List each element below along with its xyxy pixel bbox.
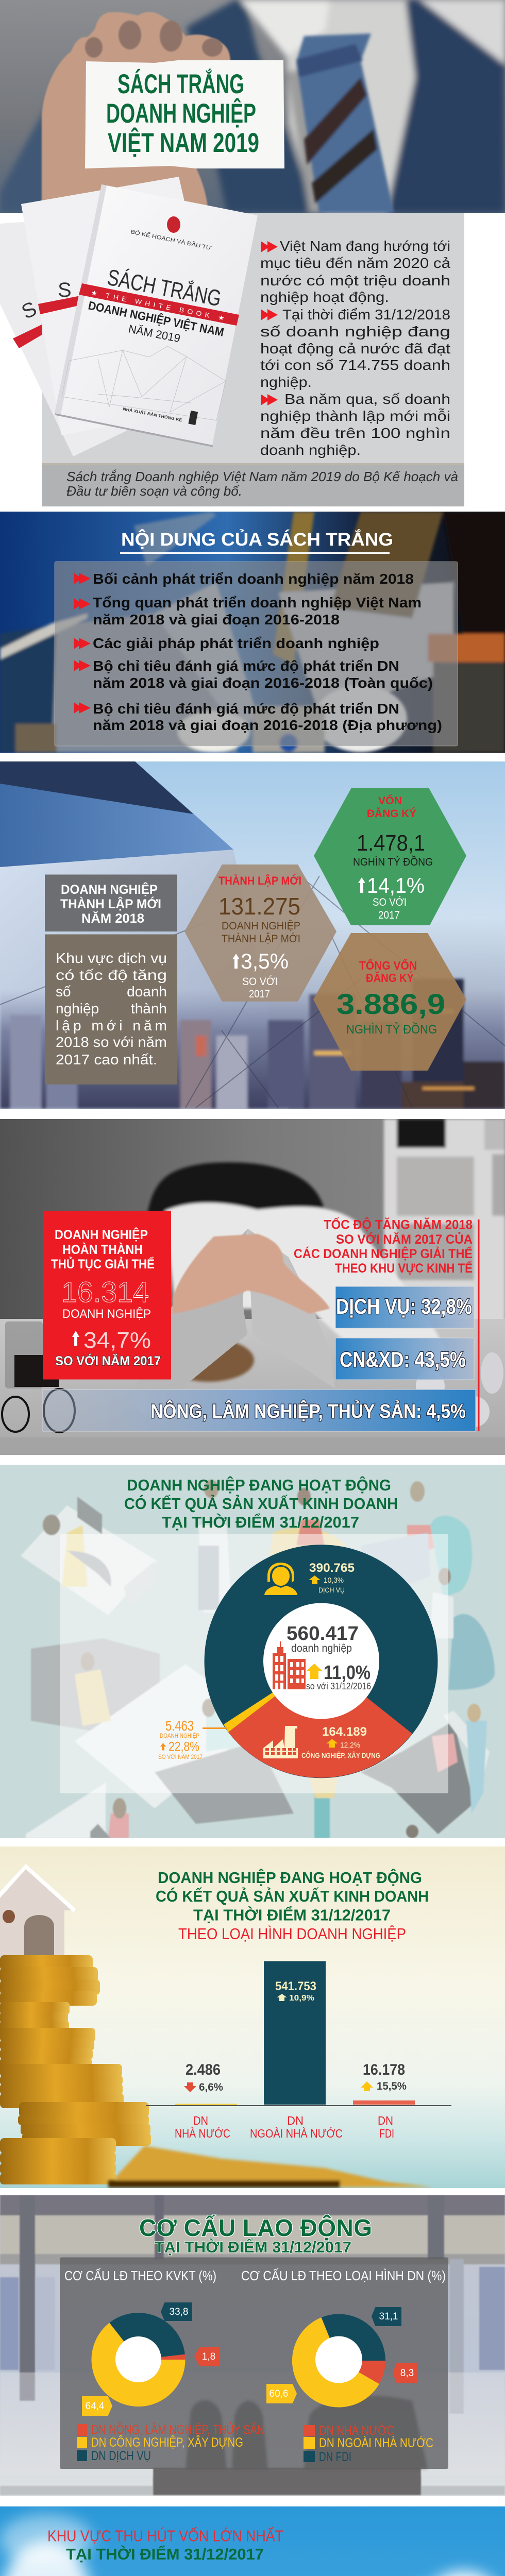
stat: agriculture [43, 1389, 476, 1431]
panel: dissolved enterprises figures: 16.314 [61, 1276, 149, 1308]
list item: Bộ chỉ tiêu đánh giá mức độ phát triển DN [93, 658, 399, 674]
hexagon: registered capital: NGHÌN TỶ ĐỒNG [353, 856, 433, 868]
bar: non-state enterprises: 10,9% [289, 1994, 314, 2003]
text block: services sector note: doanh [127, 984, 167, 999]
callout: agriculture share: 1,8 [202, 2351, 215, 2362]
photo: office interior [0, 2195, 505, 2495]
list item [93, 658, 433, 691]
panel: dissolved enterprises figures: DOANH NGHIỆP [62, 1307, 151, 1321]
callout: non-state share [267, 2384, 296, 2403]
icon: factory [263, 1726, 298, 1758]
illustration: stack of white books: S [18, 297, 40, 324]
text block: book bullet points: Việt Nam đang hướng tới [280, 238, 450, 254]
bar chart: enterprises by ownership [146, 1961, 451, 2140]
hexagon: newly established: THÀNH LẬP MỚI [218, 874, 301, 887]
hexagon: registered capital: 2017 [378, 909, 400, 921]
panel: dissolved enterprises [0, 1119, 505, 1455]
callout: services share: 33,8 [170, 2307, 188, 2317]
heading: TẠI THỜI ĐIỂM 31/12/2017 [155, 2238, 351, 2256]
hexagon: registered capital: ĐĂNG KÝ [367, 807, 416, 820]
icon: red double arrow [74, 598, 91, 609]
icon: red double arrow [261, 309, 278, 320]
illustration: stack of white books: ★ THE WHITE BOOK ★ [90, 289, 228, 323]
panel: dissolved enterprises figures: 34,7% [83, 1328, 151, 1353]
heading [139, 2214, 372, 2256]
text block: services sector note: nghiệp [56, 1001, 99, 1016]
panel: active enterprises by ownership [0, 1846, 505, 2188]
bar: non-state enterprises [264, 1961, 326, 2105]
stat: industry and construction: CÔNG NGHIỆP, XÂY DỰNG [301, 1751, 380, 1759]
stat: industry and construction [335, 1338, 474, 1380]
callout: services share [161, 2303, 192, 2320]
hexagon: total registered capital: TỔNG VỐN [359, 958, 417, 972]
panel: dissolved enterprises figures [43, 1211, 171, 1380]
panel: active enterprises circle chart [0, 1465, 505, 1838]
callout: industry share [82, 2397, 112, 2415]
stat: total active enterprises: 560.417 [287, 1623, 359, 1645]
hexagon: newly established [184, 865, 336, 1002]
donut chart: active enterprises by sector [158, 1545, 438, 1778]
stat: total active enterprises [287, 1623, 371, 1691]
text block: services sector note: Khu vực dịch vụ [56, 950, 167, 966]
panel: dissolved enterprises figures: DOANH NGHIỆP [55, 1227, 148, 1242]
heading: DOANH NGHIỆP ĐANG HOẠT ĐỘNG [158, 1868, 422, 1887]
icon: ministry emblem [167, 216, 180, 233]
heading: CÓ KẾT QUẢ SẢN XUẤT KINH DOANH [156, 1887, 429, 1905]
hexagon: total registered capital [313, 933, 466, 1071]
heading: NỘI DUNG CỦA SÁCH TRẮNG [121, 529, 393, 550]
stat: services [309, 1561, 355, 1594]
hexagon: total registered capital: ĐĂNG KÝ [366, 971, 414, 985]
icon: hand holding card [42, 12, 230, 213]
text block: services sector note: số [56, 984, 71, 999]
photo: gold coins and house [0, 1864, 433, 2188]
text block: book bullet points: mục tiêu đến năm 2020 cả [260, 255, 450, 271]
heading: TẠI THỜI ĐIỂM 31/12/2017 [193, 1905, 391, 1924]
photo: office shelf [384, 1119, 505, 1335]
illustration: stack of white books: BỘ KẾ HOẠCH VÀ ĐẦU TƯ [130, 228, 212, 251]
text block: book bullet points: nghiệp. [260, 374, 312, 390]
hexagon: newly established: 2017 [249, 988, 270, 1000]
title: VIỆT NAM 2019 [108, 127, 259, 158]
stat: agriculture: SO VỚI NĂM 2017 [158, 1753, 203, 1760]
callout: FDI share: 31,1 [379, 2311, 398, 2322]
photo: glass and spectacles [2, 1321, 503, 1432]
legend: ownership: DN FDI [319, 2450, 351, 2464]
heading: TẠI THỜI ĐIỂM 31/12/2017 [162, 1513, 359, 1531]
donut chart: labour by economic sector [82, 2303, 218, 2415]
list item [93, 701, 442, 733]
stat: total active enterprises: 11,0% [324, 1662, 371, 1684]
title [106, 68, 259, 158]
city skyline [0, 979, 505, 1109]
stat: FDI enterprises: 16.178 [363, 2061, 405, 2078]
stat: agriculture [158, 1718, 227, 1760]
stat: industry and construction: 164.189 [322, 1725, 367, 1739]
chart title: CƠ CẤU LĐ THEO LOẠI HÌNH DN (%) [241, 2268, 446, 2283]
bar: non-state enterprises: 541.753 [275, 1979, 316, 1993]
hexagon: registered capital: 1.478,1 [357, 831, 425, 856]
panel: new enterprises heading: THÀNH LẬP MỚI [60, 896, 161, 911]
illustration: people silhouettes [186, 2396, 428, 2469]
icon: red office buildings [273, 1641, 306, 1689]
heading: THEO LOẠI HÌNH DOANH NGHIỆP [178, 1925, 406, 1943]
axis labels: DN [287, 2114, 304, 2127]
hexagon: registered capital: SO VỚI [373, 896, 407, 908]
panel: dissolved enterprises figures: THỦ TỤC GIẢI THỂ [51, 1256, 155, 1272]
hexagon: registered capital [314, 788, 466, 925]
hexagon: newly established: 131.275 [218, 893, 300, 920]
hexagon: total registered capital: NGHÌN TỶ ĐỒNG [346, 1022, 437, 1037]
panel: book contents [0, 512, 505, 753]
panel: new enterprises heading: NĂM 2018 [81, 911, 144, 926]
text block: book bullet points: Ba năm qua, số doanh [284, 391, 450, 407]
illustration: stack of white books: SÁCH TRẮNG [105, 264, 224, 312]
text block: services sector note: lập mới năm [56, 1018, 167, 1033]
stat: industry and construction: CN&XD: 43,5% [340, 1347, 466, 1371]
illustration: isometric office background [21, 1480, 495, 1838]
illustration: stack of white books [0, 177, 258, 456]
legend: economic sectors [77, 2421, 264, 2463]
panel: new enterprises heading: DOANH NGHIỆP [61, 882, 158, 897]
text block: book bullet points: nghiệp thành lập mới mỗi [260, 408, 450, 424]
axis labels [175, 2114, 394, 2140]
list item: Các giải pháp phát triển doanh nghiệp [93, 635, 379, 651]
text block: book bullet points: doanh nghiệp. [260, 442, 361, 458]
photo: person at laptop [144, 1162, 453, 1382]
hexagon: newly established: 3,5% [241, 949, 289, 973]
legend: ownership: DN NGOÀI NHÀ NƯỚC [319, 2435, 433, 2450]
donut chart: labour by ownership [267, 2308, 417, 2408]
text block: book bullet points: nước có một triệu doanh [260, 273, 450, 289]
callout: industry share: 64,4 [86, 2401, 105, 2412]
stat: services: 10,3% [324, 1576, 344, 1585]
chart title: CƠ CẤU LĐ THEO KVKT (%) [64, 2268, 216, 2283]
list item: Tổng quan phát triển doanh nghiệp Việt Nam [93, 595, 422, 611]
axis labels: DN [193, 2114, 208, 2127]
heading [124, 1476, 398, 1531]
dark chart panel [60, 2258, 448, 2469]
axis labels: FDI [379, 2127, 394, 2140]
panel: dissolved enterprises figures: SO VỚI NĂM 2017 [55, 1353, 161, 1368]
heading: CƠ CẤU LAO ĐỘNG [139, 2214, 372, 2241]
icon: fingernails [85, 21, 223, 58]
legend: ownership: DN NHÀ NƯỚC [319, 2423, 394, 2438]
text block: book bullet points: hoạt động cả nước đã đạt [260, 341, 450, 357]
list item: năm 2018 và giai đoạn 2016-2018 [93, 612, 340, 628]
hexagon: newly established: DOANH NGHIỆP [222, 920, 300, 932]
illustration: stack of white books: NHÀ XUẤT BẢN THỐNG KÊ [123, 406, 183, 422]
callout: state share [393, 2364, 417, 2382]
heading: growth by sector: THEO KHU VỰC KINH TẾ [335, 1261, 473, 1276]
heading: KHU VỰC THU HÚT VỐN LỚN NHẤT [47, 2527, 283, 2545]
caption bar: Sách trắng Doanh nghiệp Việt Nam năm 2019 do Bộ Kế hoạch và [66, 469, 458, 484]
stat: FDI enterprises [361, 2061, 407, 2092]
stat: services: DỊCH VỤ: 32,8% [336, 1294, 472, 1318]
caption bar: Đầu tư biên soạn và công bố. [66, 483, 242, 499]
panel: dissolved enterprises figures: HOÀN THÀNH [62, 1242, 143, 1257]
heading: growth by sector: CÁC DOANH NGHIỆP GIẢI THỂ [294, 1246, 473, 1261]
text block: services sector note: 2017 cao nhất. [56, 1052, 157, 1067]
title: DOANH NGHIỆP [106, 97, 256, 129]
stat: services: 390.765 [309, 1561, 355, 1575]
axis labels: NGOÀI NHÀ NƯỚC [250, 2127, 343, 2140]
panel: book summary on grey [0, 177, 464, 506]
panel: new enterprises heading [45, 875, 177, 931]
stat: industry and construction: 12,2% [340, 1741, 360, 1750]
legend: economic sectors: DN DỊCH VỤ [91, 2449, 151, 2463]
hexagon: registered capital: VỐN [378, 794, 402, 807]
stat: industry and construction [301, 1725, 380, 1759]
panel: hero photo with title card [0, 0, 505, 213]
icon: headset agent [264, 1563, 297, 1595]
callout: agriculture share [195, 2347, 218, 2366]
list item [93, 595, 422, 628]
icon: red double arrow [74, 660, 91, 671]
title: SÁCH TRẮNG [117, 68, 244, 99]
stat: total active enterprises: doanh nghiệp [291, 1642, 352, 1654]
photo: desk [0, 1319, 505, 1437]
illustration: stack of white books: S [58, 279, 72, 301]
heading [47, 2527, 283, 2563]
callout: non-state share: 60,6 [270, 2388, 288, 2399]
heading: CÓ KẾT QUẢ SẢN XUẤT KINH DOANH [124, 1494, 398, 1513]
title card [85, 60, 284, 168]
stat: agriculture: 5.463 [165, 1718, 194, 1734]
stat: state enterprises: 6,6% [199, 2081, 223, 2093]
panel: new enterprises 2018 [0, 761, 505, 1109]
stat: services [335, 1286, 474, 1328]
heading: growth by sector [294, 1217, 473, 1276]
icon: up arrow [72, 1331, 79, 1346]
stat: state enterprises [184, 2061, 223, 2093]
legend: economic sectors: DN NÔNG, LÂM NGHIỆP, THỦY SẢN [91, 2421, 264, 2437]
stat: agriculture: DOANH NGHIỆP [160, 1732, 199, 1739]
heading: TẠI THỜI ĐIỂM 31/12/2017 [66, 2545, 264, 2563]
heading: growth by sector: SO VỚI NĂM 2017 CỦA [336, 1231, 473, 1247]
bar: FDI enterprises [353, 2100, 415, 2105]
list item: Bộ chỉ tiêu đánh giá mức độ phát triển DN [93, 701, 399, 717]
icon: up arrow [358, 877, 365, 893]
bar: state enterprises [175, 2104, 237, 2105]
text block: book bullet points: năm đều trên 100 nghìn [260, 425, 450, 441]
hexagon: newly established: SO VỚI [242, 976, 278, 988]
callout: state share: 8,3 [400, 2368, 414, 2379]
icon: red double arrow [74, 702, 91, 714]
panel: labour structure [0, 2195, 505, 2496]
icon: red double arrow [74, 573, 91, 584]
icon: red double arrow [261, 241, 278, 252]
hexagon: newly established: THÀNH LẬP MỚI [222, 933, 300, 945]
text block: book bullet points [260, 238, 450, 458]
callout: FDI share [372, 2308, 401, 2326]
text block: book bullet points: tới con số 714.755 doanh [260, 357, 450, 373]
text block: services sector note: 2018 so với năm [56, 1034, 167, 1050]
text block: book bullet points: số doanh nghiệp đang [260, 324, 450, 340]
stat: agriculture: NÔNG, LÂM NGHIỆP, THỦY SẢN: 4,5% [150, 1399, 466, 1422]
text block: services sector note: có tốc độ tăng [56, 967, 167, 983]
text block: services sector note [45, 935, 177, 1084]
illustration: stack of white books: NĂM 2019 [127, 322, 181, 345]
icon: red double arrow [261, 394, 278, 405]
text block: services sector note: thành [131, 1001, 167, 1016]
stat: total active enterprises: so với 31/12/2016 [306, 1681, 371, 1691]
hexagon: registered capital: 14,1% [367, 873, 425, 897]
caption bar [42, 465, 464, 506]
stat: services: DỊCH VỤ [318, 1586, 345, 1594]
list item: năm 2018 và giai đoạn 2016-2018 (Toàn quốc) [93, 675, 433, 691]
text block: book bullet points: nghiệp hoạt động. [260, 289, 389, 305]
panel: largest capital attraction [0, 2506, 505, 2576]
photo: clouds [0, 2514, 504, 2576]
legend: ownership [304, 2423, 433, 2464]
legend: economic sectors: DN CÔNG NGHIỆP, XÂY DỰNG [91, 2435, 243, 2450]
text block: book bullet points: Tại thời điểm 31/12/2018 [282, 307, 450, 323]
stat: agriculture: 22,8% [169, 1739, 199, 1754]
icon: red double arrow [74, 638, 91, 649]
axis labels: DN [378, 2114, 393, 2127]
heading: DOANH NGHIỆP ĐANG HOẠT ĐỘNG [127, 1476, 391, 1494]
stat: FDI enterprises: 15,5% [377, 2080, 407, 2092]
axis labels: NHÀ NƯỚC [175, 2127, 230, 2140]
hexagon: total registered capital: 3.886,9 [336, 988, 445, 1020]
icon: up arrow [232, 954, 240, 969]
list item: năm 2018 và giai đoạn 2016-2018 (Địa phương) [93, 717, 442, 733]
illustration: stack of white books: DOANH NGHIỆP VIỆT NAM [87, 298, 225, 339]
heading: growth by sector: TỐC ĐỘ TĂNG NĂM 2018 [324, 1217, 473, 1232]
glass frame lines [0, 871, 505, 1108]
content list panel [55, 562, 458, 746]
list item: Bối cảnh phát triển doanh nghiệp năm 2018 [93, 571, 414, 587]
stat: state enterprises: 2.486 [186, 2061, 221, 2078]
heading [156, 1868, 429, 1943]
